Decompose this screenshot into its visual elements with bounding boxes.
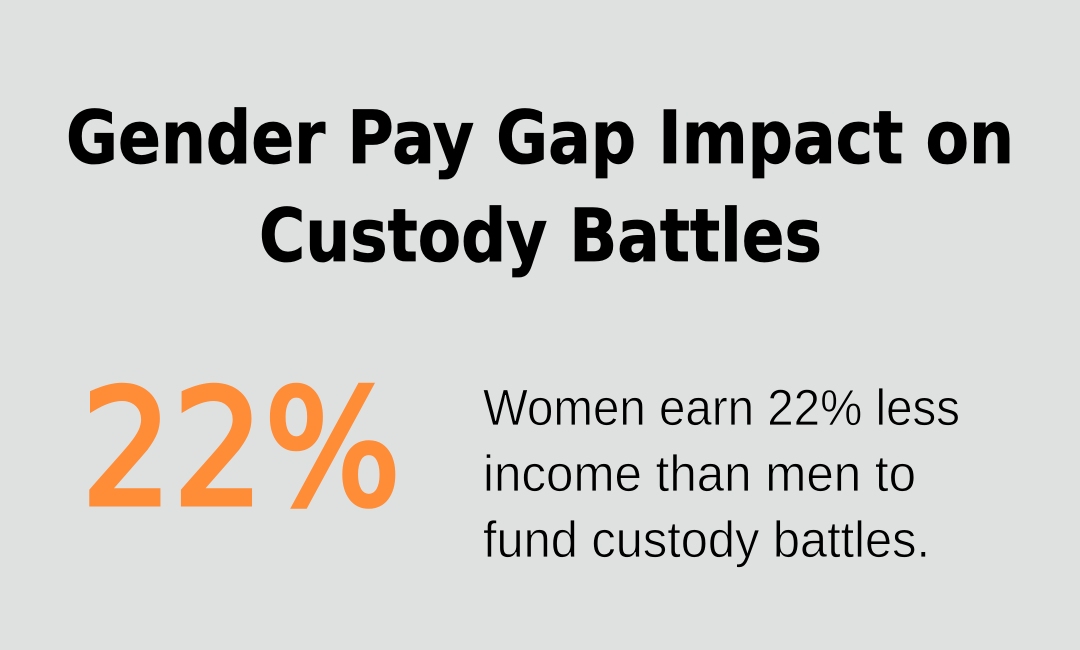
title: Custody Battles — [259, 194, 822, 279]
title — [66, 96, 1014, 279]
description text — [483, 379, 960, 568]
description text: fund custody battles. — [483, 511, 930, 568]
description text: Women earn 22% less — [483, 379, 960, 436]
big statistic: 22%: 22% — [81, 355, 401, 542]
description text: income than men to — [483, 445, 916, 502]
